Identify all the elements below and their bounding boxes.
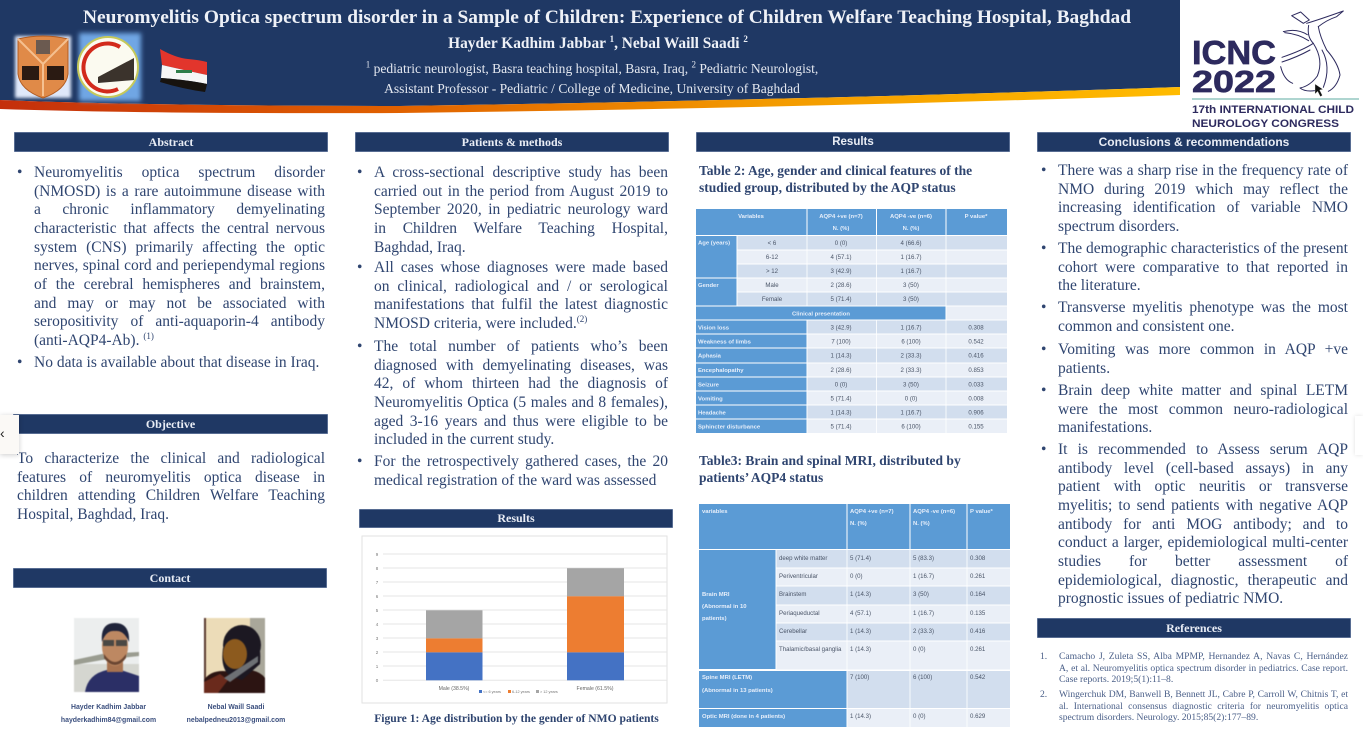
stacked bar chart: age by gender: 5	[376, 608, 379, 613]
table 2: 1 (16.7)	[900, 254, 922, 261]
table 2: 0.542	[968, 338, 984, 346]
table 2: Gender	[698, 283, 719, 289]
text block: abstract: of the cerebral hemispheres and brainstem,	[34, 276, 325, 293]
icon: ICNC 2022 congress logo: ICNC	[1192, 35, 1276, 72]
contact details: Nebal: Nebal Waill Saadi	[208, 704, 264, 711]
table 2: 0.008	[968, 396, 984, 402]
table 2: 0.416	[968, 352, 984, 360]
text: •	[357, 453, 362, 470]
contact details: Hayder	[61, 704, 156, 724]
table 3: Brain MRI	[702, 592, 730, 598]
text block: methods bullet 1: in Children Welfare Teaching Hospital,	[374, 220, 668, 237]
table 3: 1 (16.7)	[913, 610, 934, 617]
table 3: N. (%)	[850, 521, 867, 527]
table 3: 0 (0)	[850, 573, 863, 580]
text block: methods bullet 2: on clinical, radiological and / or serological	[374, 278, 668, 295]
table 3: 0.416	[970, 628, 986, 635]
text block: conclusion 1: spectrum disorders.	[1058, 218, 1179, 235]
table 3: Optic MRI (done in 4 patients)	[702, 714, 785, 720]
text block: conclusion 1: There was a sharp rise in the frequency rate of	[1058, 162, 1348, 179]
heading: Conclusions & recommendations: Conclusions & recommendations	[1099, 135, 1289, 149]
table 3: 0.261	[970, 646, 986, 653]
heading: Contact	[13, 568, 327, 588]
male stack	[426, 610, 482, 680]
table 3: 1 (14.3)	[850, 713, 871, 720]
table 3: Spine MRI (LETM)	[702, 675, 752, 681]
text block: conclusion 1: increasing identification of variable NMO	[1058, 199, 1348, 216]
text block: abstract: (anti-AQP4-Ab). (1)	[34, 331, 154, 349]
reference 1	[1040, 651, 1348, 685]
stacked bar chart: age by gender: 8	[376, 566, 379, 571]
affiliations	[366, 59, 818, 96]
table 3: variables	[702, 509, 728, 515]
legend: 6-12 years	[512, 690, 530, 694]
table 3: (Abnormal in 10	[702, 604, 747, 610]
table 2: Clinical presentation	[792, 312, 850, 318]
stacked bar chart: age by gender: 6	[376, 594, 379, 599]
table 3: 0.261	[970, 573, 986, 580]
table 2: 3 (50)	[903, 382, 919, 388]
text block: methods bullet 1: A cross-sectional descriptive study has been	[374, 164, 668, 181]
table 2: 4 (66.6)	[900, 240, 922, 247]
table 2: Variables	[738, 214, 765, 220]
heading: Objective: Objective	[146, 417, 195, 431]
table 3: (Abnormal in 13 patients)	[702, 688, 773, 694]
table 2: 0.033	[968, 382, 984, 388]
text block: abstract: system (CNS) primarily affecting the optic	[34, 239, 325, 256]
table 2: N. (%)	[903, 226, 919, 232]
text block: conclusion 5	[1041, 382, 1348, 436]
text block: conclusion 6: myelitis; to send patients with negative AQP	[1058, 497, 1348, 514]
header banner	[0, 0, 1180, 114]
text block: objective: children attending Children Welfare Teaching	[17, 487, 325, 504]
icon: medical city logo	[76, 30, 144, 105]
table 2: 2 (28.6)	[830, 282, 852, 289]
table 2: 3 (42.9)	[830, 268, 852, 275]
text: •	[1041, 299, 1046, 316]
table 2: 6 (100)	[901, 338, 921, 346]
table 3: Periaqueductal	[779, 610, 820, 617]
table 2: Encephalopathy	[698, 368, 744, 374]
stacked bar chart: age by gender: Female (61.5%)	[577, 686, 614, 692]
overlay: left slide control: ‹	[0, 425, 5, 441]
text block: methods bullet 3: diagnosed with demyelinating diseases, was	[374, 357, 668, 374]
table 2 title	[699, 163, 972, 195]
authors: Hayder Kadhim Jabbar 1, Nebal Waill Saadi 2	[448, 34, 748, 52]
table 2: 2 (33.3)	[900, 367, 922, 374]
table 2: Age (years)	[698, 240, 730, 246]
text block: conclusion 5: were the most common neuro-radiological	[1058, 401, 1348, 418]
stacked bar chart: age by gender: 7	[376, 580, 379, 585]
table 2: 5 (71.4)	[830, 424, 852, 430]
table 2: 0.853	[968, 367, 984, 374]
text block: conclusion 3	[1041, 299, 1348, 335]
text block: conclusion 4: patients.	[1058, 360, 1110, 377]
reference 1: Case reports. 2019;5(1):11–8.	[1059, 674, 1173, 685]
affiliations: Assistant Professor - Pediatric / College of Medicine, University of Baghdad	[384, 80, 800, 96]
table 2: 3 (50)	[903, 282, 919, 289]
table 2: < 6	[768, 240, 777, 247]
table 3: P value*	[970, 509, 994, 515]
text: •	[357, 164, 362, 181]
text block: abstract	[17, 164, 325, 349]
text block: conclusion 6: It is recommended to Assess serum AQP	[1058, 441, 1348, 458]
table 3: Brainstem	[779, 591, 806, 598]
table 3: 1 (16.7)	[913, 573, 934, 580]
text: •	[1041, 441, 1046, 458]
table 2 title: Table 2: Age, gender and clinical features of the	[699, 163, 972, 178]
reference 2	[1040, 689, 1348, 723]
text block: conclusion 6: conduct a larger, epidemiological multi-center	[1058, 534, 1348, 551]
reference 1: A, et al. Neuromyelitis optica spectrum disorder in pediatrics. Case report.	[1059, 663, 1348, 674]
heading: Results (chart)	[359, 509, 673, 528]
photo: Hayder Kadhim Jabbar	[73, 618, 140, 693]
table 2: Female	[762, 296, 783, 303]
table 3: 5 (83.3)	[913, 555, 934, 562]
table 3: 0.629	[970, 713, 986, 720]
reference 1: Camacho J, Zuleta SS, Alba MPMP, Hernandez A, Navas C, Hernández	[1059, 651, 1348, 662]
affiliations: 1 pediatric neurologist, Basra teaching hospital, Basra, Iraq, 2 Pediatric Neurologist,	[366, 59, 818, 76]
table 2: 1 (14.3)	[830, 410, 852, 416]
text: •	[1041, 341, 1046, 358]
reference 2: Wingerchuk DM, Banwell B, Bennett JL, Cabre P, Carroll W, Chitnis T, et	[1059, 689, 1348, 700]
table 2: 3 (42.9)	[830, 324, 852, 332]
table 2: 1 (14.3)	[830, 352, 852, 360]
table 3: Periventricular	[779, 573, 818, 580]
table 3: patients)	[702, 616, 727, 622]
table 2: 6 (100)	[901, 424, 921, 430]
text block: conclusion 5: Brain deep white matter and spinal LETM	[1058, 382, 1348, 399]
table 2: 4 (57.1)	[830, 254, 852, 261]
table 2: 5 (71.4)	[830, 396, 852, 402]
table 3: 6 (100)	[913, 674, 932, 681]
stacked bar chart: age by gender	[362, 536, 668, 704]
table 2: 6-12	[766, 254, 779, 261]
icon: ICNC 2022 congress logo	[1192, 10, 1359, 130]
table 3: 0.308	[970, 555, 986, 562]
table 2: AQP4 -ve (n=6)	[890, 214, 932, 220]
text block: conclusion 2: The demographic characteristics of the present	[1058, 240, 1348, 257]
text block: abstract: characteristic that affects the central nervous	[34, 220, 325, 237]
text: •	[17, 354, 22, 371]
text block: abstract: (NMOSD) is a rare autoimmune disease with	[34, 183, 325, 200]
reference 2: spectrum disorders. Neurology. 2015;85(2):177–89.	[1059, 712, 1258, 723]
table 2: 2 (28.6)	[830, 367, 852, 374]
text block: conclusion 6: antibody for anti MOG antibody; and to	[1058, 516, 1348, 533]
text block: methods bullet 1: carried out in the period from August 2019 to	[374, 183, 668, 200]
table 2: P value*	[965, 214, 988, 220]
table 2: Vision loss	[698, 326, 730, 332]
stacked bar chart: age by gender: 3	[376, 636, 379, 641]
stacked bar chart: age by gender: 0	[376, 678, 379, 683]
overlay: right slide control	[1355, 416, 1363, 455]
table 2: 1 (16.7)	[900, 268, 922, 275]
text block: conclusion 3: Transverse myelitis phenotype was the most	[1058, 299, 1348, 316]
text block: methods bullet 4	[357, 453, 668, 489]
text block: abstract: nerves, spinal cord and periependymal regions	[34, 257, 325, 274]
overlay: left slide control	[0, 415, 19, 454]
heading: Contact: Contact	[150, 571, 190, 585]
text block: methods bullet 3: included in the current study.	[374, 431, 554, 448]
legend: > 12 years	[540, 690, 558, 694]
icon: ICNC 2022 congress logo: 2022	[1192, 65, 1276, 99]
text block: objective: To characterize the clinical and radiological	[17, 450, 325, 467]
reference 2: al. International consensus diagnostic criteria for neuromyelitis optica	[1059, 701, 1348, 712]
text: •	[1041, 162, 1046, 179]
heading: Results (tables): Results	[832, 136, 874, 148]
icon: university shield logo	[12, 34, 74, 100]
table 2: Weakness of limbs	[698, 340, 752, 346]
table 2: 0.155	[968, 424, 984, 430]
table 2: 2 (33.3)	[900, 352, 922, 360]
table 3: 0.135	[970, 610, 986, 617]
table 3: 1 (14.3)	[850, 591, 871, 598]
text block: conclusion 6: epidemiological, diagnostic, therapeutic and	[1058, 572, 1348, 589]
table 2: 0 (0)	[835, 240, 847, 247]
table 2: Sphincter disturbance	[698, 424, 761, 430]
heading: References	[1037, 618, 1351, 638]
table 2: 3 (50)	[903, 296, 919, 303]
heading: Conclusions & recommendations	[1037, 132, 1351, 152]
text block: conclusion 2	[1041, 240, 1348, 294]
table 3: 0.542	[970, 674, 986, 681]
heading: Abstract	[14, 132, 328, 152]
text block: conclusion 2: the literature.	[1058, 277, 1141, 294]
table 3: AQP4 +ve (n=7)	[850, 509, 894, 515]
table 3: 1 (14.3)	[850, 628, 871, 635]
text block: methods bullet 3: aged 3-16 years and thus were eligible to be	[374, 413, 668, 430]
text block: conclusion 5: manifestations.	[1058, 419, 1152, 436]
icon: ICNC 2022 congress logo: 17th INTERNATIONAL CHILD	[1192, 104, 1354, 116]
text block: conclusion 4	[1041, 341, 1348, 377]
table 2: 7 (100)	[831, 338, 851, 346]
heading: Abstract: Abstract	[149, 135, 193, 149]
table 3 title: patients’ AQP4 status	[699, 470, 823, 484]
contact details: Hayder: hayderkadhim84@gmail.com	[61, 717, 156, 724]
table 2	[696, 209, 1007, 433]
table 3 title: Table3: Brain and spinal MRI, distributed by	[699, 453, 961, 468]
table 2: 0 (0)	[905, 396, 917, 402]
table 3: 0 (0)	[913, 713, 926, 720]
text block: methods bullet 3: Neuromyelitis Optica (5 males and 8 females),	[374, 394, 668, 411]
text block: methods bullet 2	[357, 259, 668, 332]
table 3: Thalamic/basal ganglia	[779, 646, 842, 653]
table 2: 0 (0)	[835, 382, 847, 388]
text block: abstract: seropositivity of anti-aquaporin-4 antibody	[34, 313, 325, 330]
stacked bar chart: age by gender: 1	[376, 664, 379, 669]
text block: objective: features of neuromyelitis optica disease in	[17, 469, 325, 486]
heading: Objective	[13, 414, 328, 434]
table 2: Headache	[698, 410, 727, 416]
legend	[479, 690, 558, 694]
table 2: 0.308	[968, 324, 984, 332]
text block: methods bullet 3: The total number of patients who’s been	[374, 338, 668, 355]
stacked bar chart: age by gender: 4	[376, 622, 379, 627]
text block: methods bullet 3: 42, of whom thirteen had the diagnosis of	[374, 375, 668, 392]
heading: Patients & methods	[355, 132, 669, 152]
text block: conclusion 4: Vomiting was more common in AQP +ve	[1058, 341, 1348, 358]
text block: conclusion 6	[1041, 441, 1348, 607]
text block: conclusion 6: antibody level (cell-based assays) in any	[1058, 460, 1348, 477]
text block: methods bullet 4: medical registration of the ward was assessed	[374, 472, 656, 489]
contact details: Nebal	[187, 704, 285, 724]
text block: methods bullet 3	[357, 338, 668, 448]
stacked bar chart: age by gender: 2	[376, 650, 379, 655]
heading: Results (chart): Results	[497, 511, 535, 525]
icon: ICNC 2022 congress logo: NEUROLOGY CONGRESS	[1192, 118, 1339, 130]
title: Neuromyelitis Optica spectrum disorder in a Sample of Children: Experience of Children Welfare Teaching Hospital, Baghdad	[83, 7, 1131, 28]
legend: <= 6 years	[483, 690, 501, 694]
text block: abstract second bullet: No data is available about that disease in Iraq.	[34, 354, 319, 371]
text block: conclusion 6: prognostic issues of pediatric NMO.	[1058, 590, 1283, 607]
text: •	[357, 338, 362, 355]
text block: objective	[17, 450, 325, 523]
table 3: 0 (0)	[913, 646, 926, 653]
table 2: Aphasia	[698, 354, 722, 360]
text block: methods bullet 1	[357, 164, 668, 256]
text: 1.	[1040, 651, 1047, 662]
photo: Nebal Waill Saadi	[203, 617, 266, 694]
table 3: 4 (57.1)	[850, 610, 871, 617]
figure caption: Figure 1: Age distribution by the gender of NMO patients	[374, 712, 659, 725]
text block: conclusion 6: studies for better assessment of	[1058, 553, 1348, 570]
text: •	[1041, 240, 1046, 257]
stacked bar chart: age by gender: Male (38.5%)	[439, 686, 470, 692]
table 2: > 12	[766, 268, 779, 275]
text block: methods bullet 2: All cases whose diagnoses were made based	[374, 259, 668, 276]
heading: Results (tables)	[696, 132, 1010, 152]
table 2: Seizure	[698, 382, 720, 388]
table 2: 5 (71.4)	[830, 296, 852, 303]
table 2: 1 (16.7)	[900, 410, 922, 416]
text block: conclusion 6: patient with optic neuritis or transverse	[1058, 478, 1348, 495]
table 3 title	[699, 453, 961, 485]
table 3: AQP4 -ve (n=6)	[913, 509, 955, 515]
text block: conclusion 1: NMO during 2019 which may reflect the	[1058, 181, 1348, 198]
table 2: N. (%)	[833, 226, 849, 232]
table 3: N. (%)	[913, 521, 930, 527]
text block: conclusion 2: cohort were comparative to that reported in	[1058, 259, 1348, 276]
table 2 title: studied group, distributed by the AQP status	[699, 180, 956, 195]
text: •	[357, 259, 362, 276]
text block: methods bullet 1: September 2020, in pediatric neurology ward	[374, 201, 668, 218]
stacked bar chart: age by gender: 9	[376, 552, 379, 557]
table 3: deep white matter	[779, 555, 827, 562]
female stack	[567, 568, 624, 680]
text: 2.	[1040, 689, 1047, 700]
table 3: 7 (100)	[850, 674, 869, 681]
text: •	[1041, 382, 1046, 399]
text block: methods bullet 1: Baghdad, Iraq.	[374, 239, 466, 256]
text block: objective: Hospital, Baghdad, Iraq.	[17, 506, 169, 523]
contact details: Nebal: nebalpedneu2013@gmail.com	[187, 717, 285, 724]
text: •	[17, 164, 22, 181]
table 3: 5 (71.4)	[850, 555, 871, 562]
table 2: Vomiting	[698, 396, 723, 402]
heading: Patients & methods: Patients & methods	[462, 135, 562, 149]
text block: conclusion 3: common and consistent one.	[1058, 318, 1234, 335]
text block: abstract: Neuromyelitis optica spectrum disorder	[34, 164, 325, 181]
text block: abstract: and may or may not be associated with	[34, 295, 325, 312]
table 3: Cerebellar	[779, 628, 807, 635]
text block: methods bullet 2: manifestations that fulfil the latest diagnostic	[374, 296, 668, 313]
text block: abstract: a chronic inflammatory demyelinating	[34, 201, 325, 218]
icon: Iraqi flag	[160, 49, 207, 92]
table 3	[699, 504, 1010, 727]
text block: conclusion 1	[1041, 162, 1348, 235]
table 2: AQP4 +ve (n=7)	[819, 214, 863, 220]
heading: References: References	[1166, 621, 1222, 635]
contact details: Hayder: Hayder Kadhim Jabbar	[71, 704, 146, 711]
table 3: 1 (14.3)	[850, 646, 871, 653]
table 3: 3 (50)	[913, 591, 929, 598]
table 2: Male	[765, 282, 779, 289]
text block: methods bullet 2: NMOSD criteria, were included.(2)	[374, 314, 587, 332]
table 2: 0.906	[968, 410, 984, 416]
text block: methods bullet 4: For the retrospectively gathered cases, the 20	[374, 453, 668, 470]
table 3: 2 (33.3)	[913, 628, 934, 635]
table 2: 1 (16.7)	[900, 324, 922, 332]
table 3: 0.164	[970, 591, 986, 598]
